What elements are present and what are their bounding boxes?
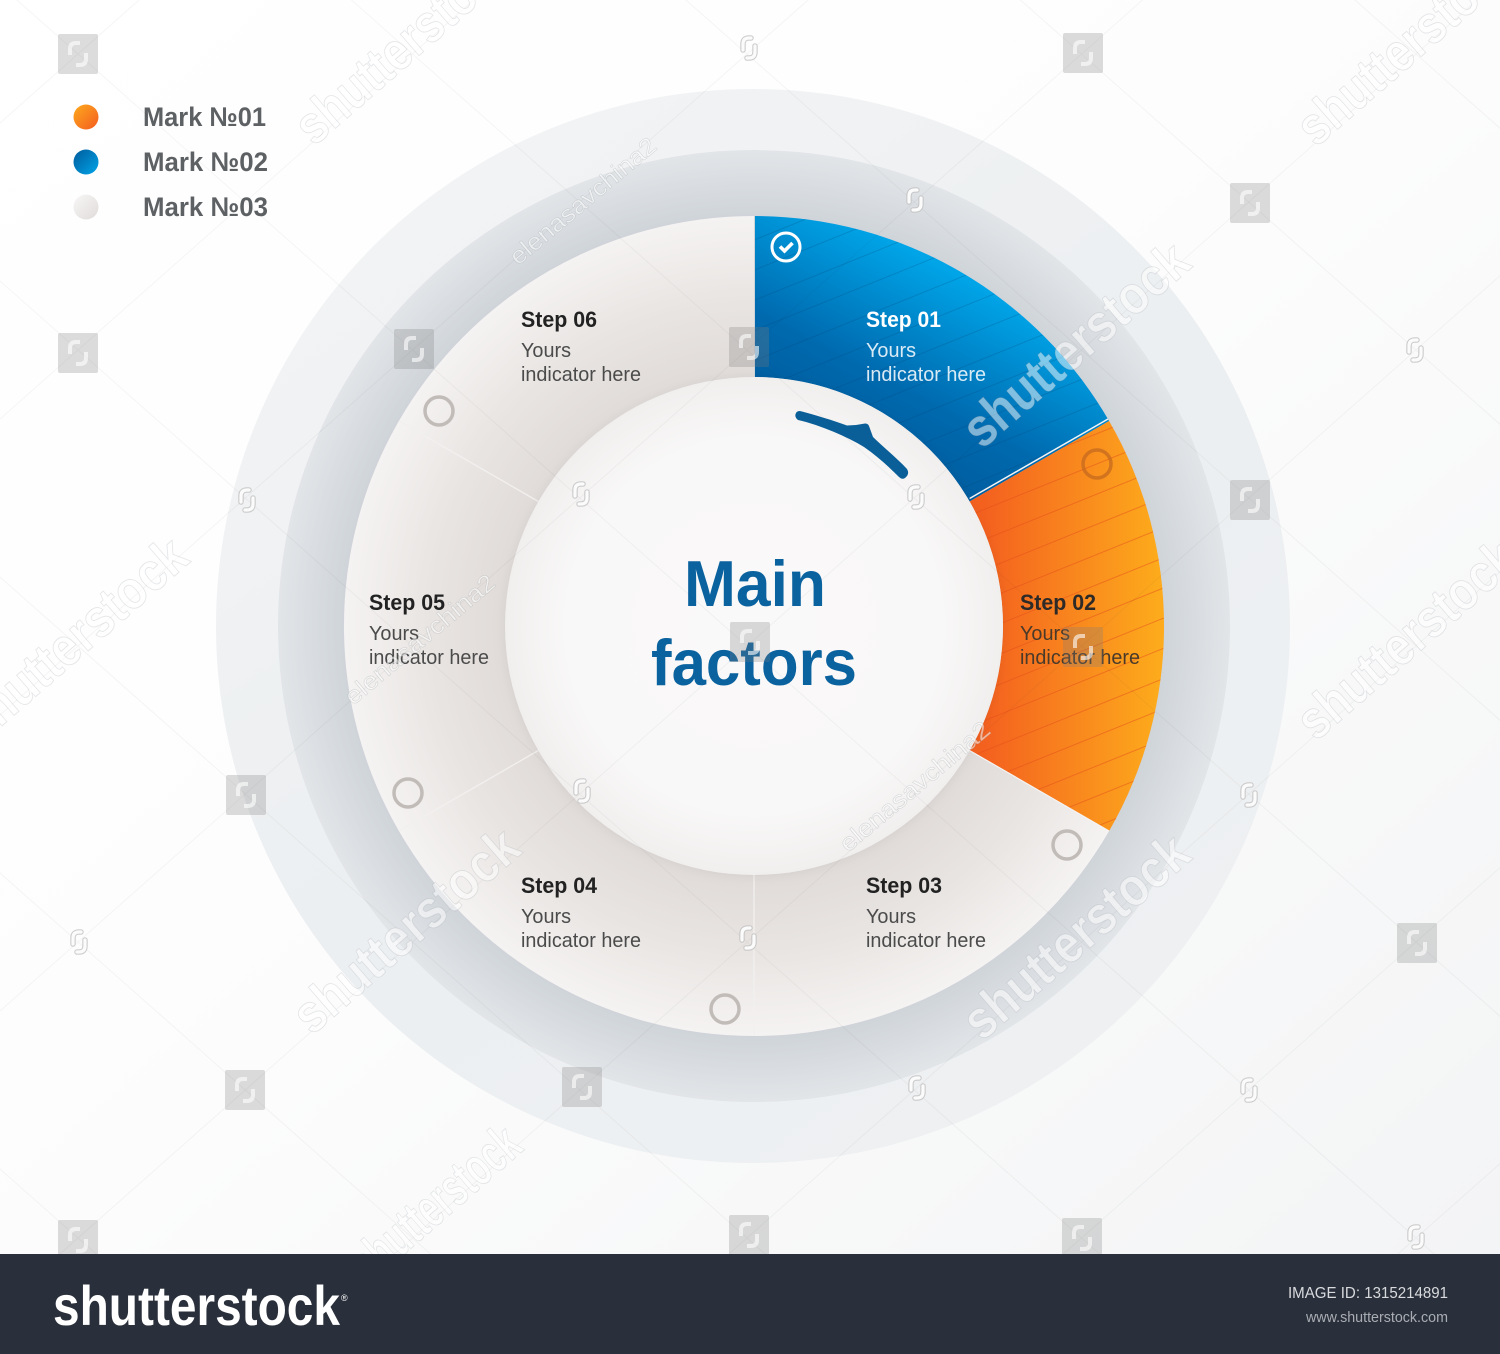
- label: step 04: indicator here: [521, 929, 641, 952]
- label: step 06: indicator here: [521, 363, 641, 386]
- watermark: contributor names: elenasavchina2: [835, 716, 996, 858]
- label: step 05: indicator here: [369, 646, 489, 669]
- label: step 01: [866, 307, 986, 386]
- legend item: mark 03: [74, 192, 268, 222]
- label: step 01: Step 01: [866, 307, 941, 332]
- background halos: [216, 89, 1290, 1163]
- icon: check badge: [772, 233, 800, 261]
- label: step 02: Yours: [1020, 622, 1070, 645]
- watermark: contributor names: elenasavchina2: [505, 132, 662, 271]
- label: step 05: Yours: [369, 622, 419, 645]
- title: Main: [684, 547, 826, 620]
- label: step 05: [369, 590, 489, 669]
- legend item: mark 02: Mark №02: [143, 147, 268, 177]
- watermark: large wordmarks: shutterstock: [951, 822, 1202, 1051]
- label: step 02: Step 02: [1020, 590, 1096, 615]
- icon: dial indicator: [795, 411, 908, 479]
- legend: [74, 102, 268, 222]
- segment: step 06: [399, 216, 754, 501]
- label: step 06: Yours: [521, 339, 571, 362]
- label: step 04: Step 04: [521, 873, 598, 898]
- label: step 05: Step 05: [369, 590, 445, 615]
- legend item: mark 01: Mark №01: [143, 102, 266, 132]
- label: step 01: Yours: [866, 339, 916, 362]
- segment: step 02: [970, 421, 1164, 831]
- title: factors: [651, 626, 857, 699]
- label: step 04: Yours: [521, 905, 571, 928]
- donut chart: [344, 216, 1164, 1036]
- footer bar: [0, 1254, 1500, 1354]
- title: [651, 547, 857, 699]
- legend item: mark 02: [74, 147, 268, 177]
- centre hub: [505, 377, 1003, 875]
- label: step 03: Step 03: [866, 873, 942, 898]
- legend item: mark 01: [74, 102, 266, 132]
- label: step 03: [866, 873, 986, 952]
- label: step 06: Step 06: [521, 307, 597, 332]
- registered mark: ®: [341, 1293, 348, 1303]
- markers: empty circles: [394, 397, 1111, 1023]
- watermark: contributor names: elenasavchina2: [340, 569, 501, 711]
- label: step 02: indicator here: [1020, 646, 1140, 669]
- image id: IMAGE ID: 1315214891: [1288, 1285, 1448, 1302]
- website: www.shutterstock.com: [1305, 1310, 1448, 1326]
- segment: step 04: [399, 750, 754, 1036]
- label: step 03: indicator here: [866, 929, 986, 952]
- label: step 06: [521, 307, 641, 386]
- label: step 04: [521, 873, 641, 952]
- watermark: large wordmarks: shutterstock: [339, 1113, 533, 1293]
- label: step 01: indicator here: [866, 363, 986, 386]
- label: step 02: [1020, 590, 1140, 669]
- watermark: contributor names: [340, 132, 996, 858]
- watermark: large wordmarks: shutterstock: [951, 230, 1202, 459]
- footer logo: shutterstock: [53, 1274, 341, 1337]
- segment: step 05: [344, 421, 538, 831]
- legend item: mark 03: Mark №03: [143, 192, 268, 222]
- watermark: large wordmarks: shutterstock: [281, 816, 532, 1045]
- segment: step 01: [755, 216, 1109, 502]
- label: step 03: Yours: [866, 905, 916, 928]
- segment: step 03: [754, 750, 1109, 1036]
